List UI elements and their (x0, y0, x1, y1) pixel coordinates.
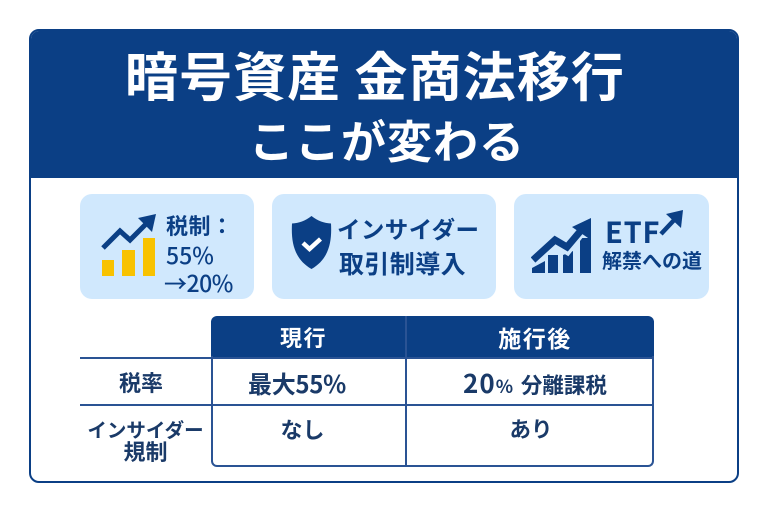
tax rate to: →20% (164, 265, 233, 299)
cell: max 55%: 最大55% (248, 365, 346, 400)
panel: tax (80, 194, 254, 299)
icon: rising chart with gold bars (101, 214, 156, 276)
tax rate from: 55% (166, 237, 214, 271)
cell: exists: あり (509, 413, 552, 444)
cell: none: なし (280, 413, 324, 445)
row label: insider regulation (87, 414, 204, 467)
row label: tax rate: 税率 (119, 366, 163, 398)
icon: chart with arrow (531, 218, 591, 273)
ETF text: ETF (605, 210, 660, 252)
header band (30, 30, 740, 178)
row label: insider regulation: インサイダー (87, 414, 204, 443)
title line 2: ここが変わる (249, 106, 525, 171)
table body border (211, 356, 654, 467)
table head band (211, 316, 654, 358)
panel: ETF (514, 194, 709, 299)
head: current: 現行 (280, 321, 327, 353)
insider text line 2: 取引制導入 (339, 245, 466, 281)
tax text: 税制： (166, 209, 234, 241)
comparison table (80, 316, 654, 467)
panel: insider (272, 194, 496, 299)
insider text: インサイダー (337, 211, 479, 245)
title line 1: 暗号資産 金商法移行 (125, 36, 625, 112)
cell: 20% separate taxation: 20% 分離課税 (463, 364, 607, 401)
ETF subtext: 解禁への道 (602, 245, 702, 274)
icon: up-right arrow (659, 210, 683, 236)
row label: insider regulation: 規制 (123, 435, 168, 467)
icon: shield with check (292, 216, 332, 269)
head: after: 施行後 (498, 320, 572, 354)
